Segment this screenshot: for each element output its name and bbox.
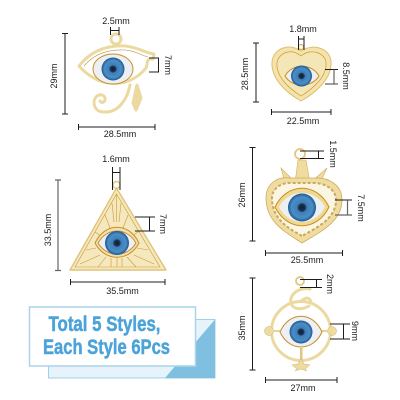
icon: eye 2: [285, 66, 319, 86]
icon: eye 1: [93, 54, 133, 84]
icon: eye 5: [280, 316, 322, 347]
dimension: bail 1.6mm: [102, 154, 130, 190]
dimension: height 26mm: 26mm: [237, 182, 247, 208]
pendant 1: eye of Horus: [49, 16, 173, 139]
icon: heart body: [272, 44, 331, 101]
dimension: eye 8.5mm: 8.5mm: [341, 62, 351, 90]
banner text: Each Style 6Pcs: [43, 336, 170, 359]
icon: ring body with crescent and star: [264, 277, 336, 371]
dimension: height 28.5mm: 28.5mm: [240, 58, 250, 90]
pendant 3: triangle: [43, 154, 168, 296]
icon: eye 3: [95, 227, 139, 257]
dimension: width 27mm: 27mm: [290, 383, 316, 393]
pendant 4: sacred heart: [237, 140, 366, 265]
dimension: height 33.5mm: 33.5mm: [43, 214, 53, 246]
banner text: Total 5 Styles,: [48, 313, 160, 336]
icon: Eye of Horus body: [79, 34, 154, 112]
dimension: width 28.5mm: 28.5mm: [104, 129, 136, 139]
dimension: eye 7mm: 7mm: [163, 55, 173, 75]
dimension: bail 2mm: 2mm: [325, 274, 335, 294]
dimension: eye 7mm: [135, 214, 168, 234]
dimension: width 35.5mm: [70, 279, 165, 296]
dimension: eye 7.5mm: 7.5mm: [356, 194, 366, 222]
callout: total styles banner: [30, 307, 215, 378]
dimension: height 35mm: 35mm: [237, 315, 247, 341]
icon: eye 4: [275, 188, 329, 226]
dimension: eye 7mm: 7mm: [158, 214, 168, 234]
dimension: bail 2.5mm: 2.5mm: [102, 16, 130, 26]
banner back panel: [48, 320, 215, 378]
dimension: bail 1.8mm: 1.8mm: [289, 24, 317, 34]
dimension: width 25.5mm: 25.5mm: [291, 255, 323, 265]
banner blue triangle: [165, 320, 215, 378]
dimension: bail 1.6mm: 1.6mm: [102, 154, 130, 164]
icon: sacred heart body: [266, 149, 342, 243]
icon: triangle body: [70, 182, 166, 270]
pendant 2: heart: [240, 24, 351, 126]
dimension: width 22.5mm: 22.5mm: [287, 116, 319, 126]
dimension: bail 1.5mm: 1.5mm: [328, 140, 338, 168]
banner text: [43, 313, 170, 359]
dimension: width 35.5mm: 35.5mm: [106, 286, 139, 296]
dimension: height 29mm: 29mm: [49, 63, 59, 89]
dimension: height 33.5mm: [43, 180, 61, 270]
banner front panel: [30, 307, 196, 366]
pendant 5: ring and star: [237, 274, 360, 393]
dimension: eye 9mm: 9mm: [350, 321, 360, 341]
